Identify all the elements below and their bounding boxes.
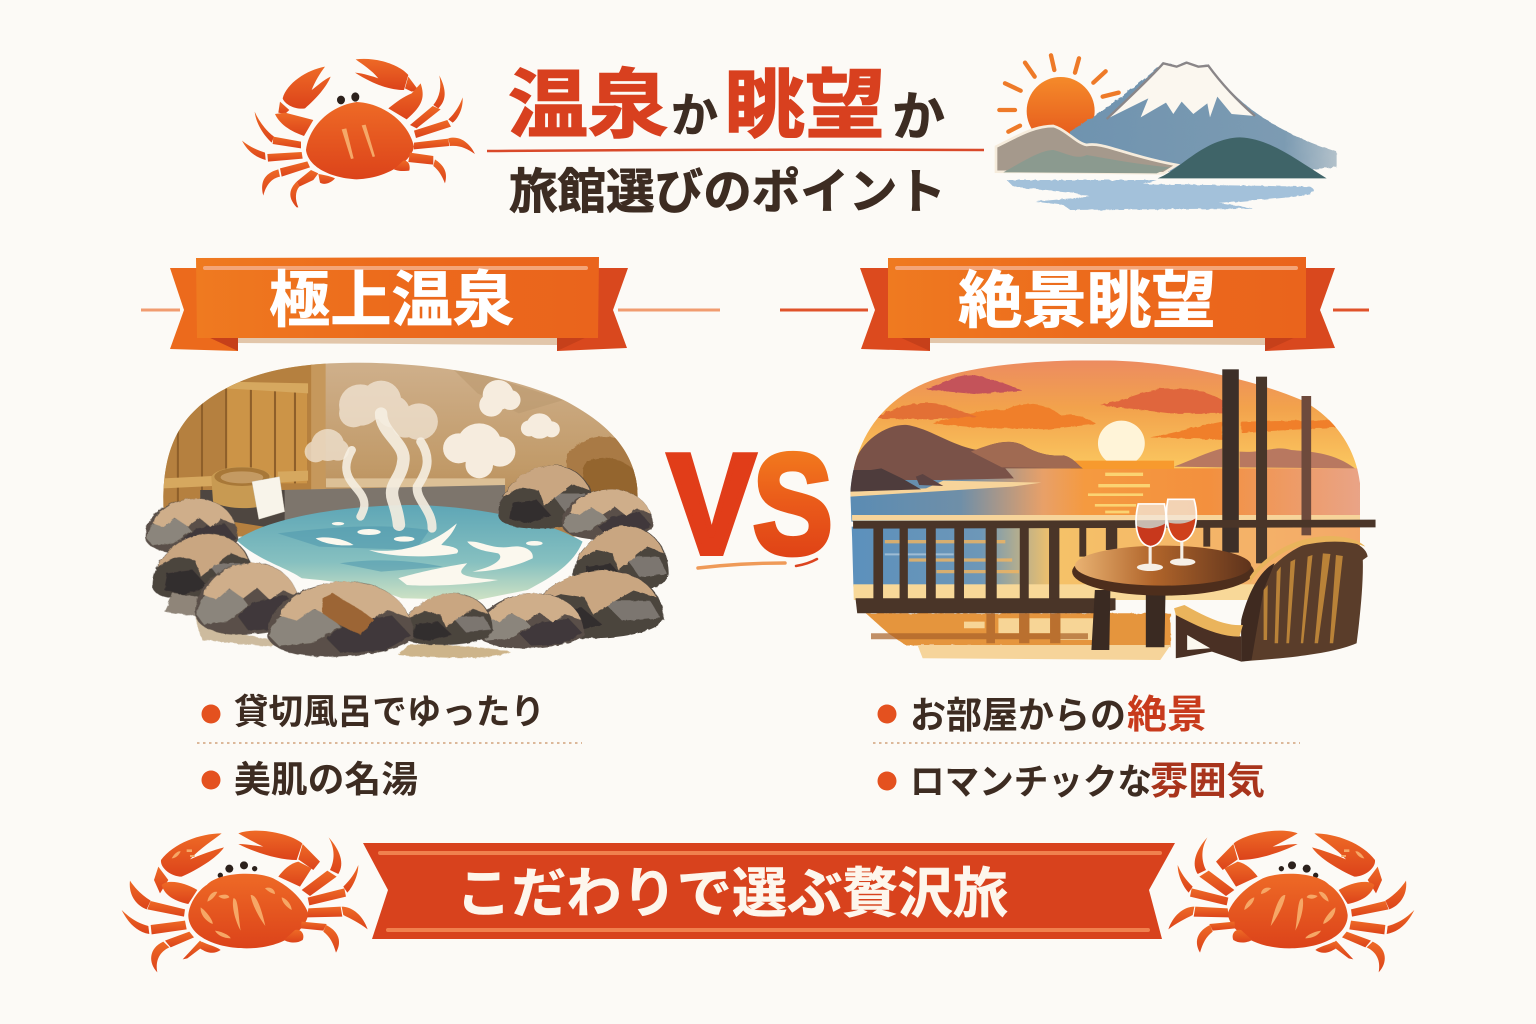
bullet list: scenic view: 絶景 — [1127, 694, 1207, 737]
window posts — [1222, 369, 1311, 563]
table — [1072, 546, 1254, 650]
title: 旅館選びのポイント — [509, 166, 946, 219]
title: か — [892, 88, 945, 147]
bullet list: hot spring: 貸切風呂でゆったり — [234, 693, 545, 732]
right ribbon: 絶景眺望 — [780, 257, 1369, 351]
bottom banner: こだわりで選ぶ贅沢旅 — [456, 864, 1008, 924]
VS mark: V — [668, 424, 755, 583]
illustration: sunset view terrace — [847, 357, 1376, 662]
bullet list: hot spring — [197, 693, 582, 800]
railing — [853, 520, 1376, 613]
VS mark: S — [753, 424, 833, 583]
mountains — [854, 425, 1083, 480]
bullet list: scenic view: お部屋からの — [910, 695, 1126, 736]
water — [236, 505, 583, 600]
illustration: open-air hot spring — [145, 360, 669, 658]
title — [487, 63, 984, 219]
infographic canvas — [122, 53, 1414, 972]
clouds — [924, 375, 1023, 394]
title: か — [671, 89, 718, 142]
right ribbon: 絶景眺望: 絶景眺望 — [958, 267, 1216, 336]
steam clouds — [305, 381, 438, 462]
bottom banner — [363, 843, 1175, 939]
icon: crab top left — [242, 59, 475, 207]
left ribbon: 極上温泉 — [141, 257, 720, 351]
icon: crab bottom right — [1168, 831, 1414, 972]
steam wisps — [346, 413, 432, 528]
wine glasses — [1136, 499, 1196, 571]
deck reflection — [866, 613, 1171, 647]
sea — [847, 468, 1363, 522]
rocks ring — [145, 465, 669, 658]
left ribbon: 極上温泉: 極上温泉 — [269, 266, 514, 334]
bullet list: hot spring: 美肌の名湯 — [234, 759, 418, 800]
bullet list: scenic view: 雰囲気 — [1150, 761, 1265, 803]
bucket — [211, 467, 273, 508]
water swirls — [316, 522, 543, 586]
pool back rim — [326, 478, 505, 487]
bullet list: scenic view — [873, 694, 1300, 803]
bullet list: scenic view: ロマンチックな — [910, 761, 1152, 802]
icon: Mount Fuji with sun — [996, 55, 1337, 210]
title: 眺望 — [725, 63, 885, 147]
VS mark — [668, 424, 833, 583]
chair — [1174, 536, 1368, 662]
lower sea and deck — [847, 527, 1363, 587]
title: 温泉 — [508, 63, 668, 147]
icon: crab bottom left — [122, 831, 368, 972]
